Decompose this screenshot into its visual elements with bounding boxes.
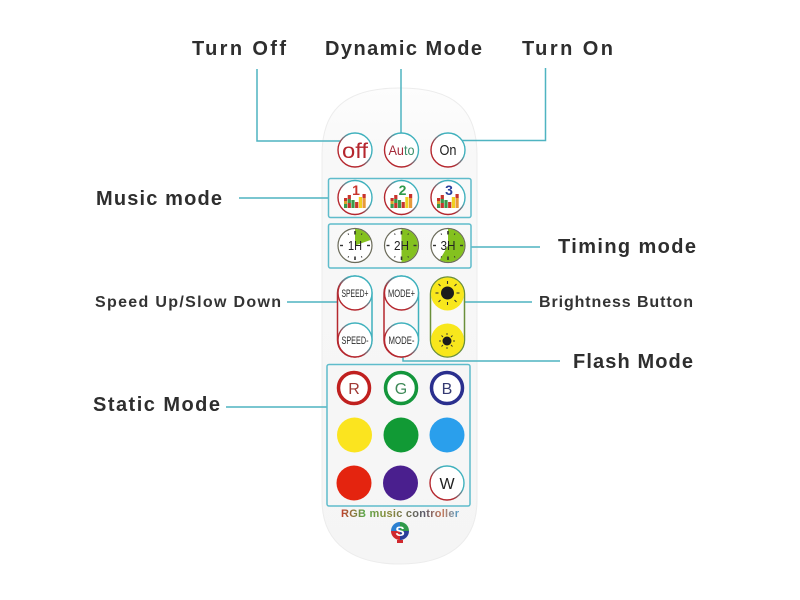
label: Speed Up/Slow Down: Speed Up/Slow Down: [95, 294, 281, 311]
label: Static Mode: Static Mode: [93, 394, 220, 416]
button: music 1: [338, 180, 372, 214]
button: light blue: [430, 418, 464, 452]
button: 2H: [384, 228, 418, 262]
button: G: [386, 372, 416, 404]
connector: Flash Mode: [403, 357, 560, 361]
button: 1H: 1H: [348, 238, 362, 253]
button: R: [338, 372, 370, 404]
button: B: B: [442, 381, 452, 398]
button: red: [336, 466, 372, 500]
button: Auto: Auto: [388, 142, 415, 158]
label: Turn Off: Turn Off: [192, 38, 286, 60]
connector: Music mode: [239, 197, 328, 199]
connector: Static Mode: [226, 406, 327, 408]
button: purple: [383, 466, 418, 500]
label: Dynamic Mode: Dynamic Mode: [325, 38, 482, 60]
button pair: mode: [384, 276, 418, 357]
button pair: speed: [338, 276, 372, 357]
connector: Turn On: [460, 68, 546, 140]
panel: timing mode buttons: [328, 224, 471, 268]
button: 3H: 3H: [440, 238, 456, 253]
label: Turn On: Turn On: [522, 38, 613, 60]
button: music 3: 3: [445, 182, 453, 198]
button: B: [432, 372, 462, 404]
button: off: [338, 133, 372, 167]
panel: static mode buttons: [327, 364, 470, 506]
button: R: R: [348, 381, 360, 398]
label: Music mode: Music mode: [96, 188, 222, 210]
button: MODE+: MODE+: [388, 288, 415, 300]
button: W: [430, 466, 464, 500]
button: music 2: 2: [399, 182, 407, 198]
connector: Brightness Button: [465, 301, 532, 303]
button: 2H: 2H: [394, 238, 409, 253]
button: green: [384, 418, 418, 452]
connector: Timing mode: [471, 246, 540, 248]
button: 3H: [431, 228, 465, 262]
icon: brand logo: S: [395, 523, 405, 539]
button: MODE-: MODE-: [388, 335, 415, 347]
remote body: [322, 88, 477, 564]
button: G: G: [395, 381, 407, 398]
button: music 3: [431, 180, 465, 214]
icon: bright sun: [431, 278, 464, 310]
button: 1H: [338, 228, 372, 262]
button: music 2: [384, 180, 418, 214]
label: Flash Mode: Flash Mode: [573, 351, 693, 373]
brand text: RGB music controller: [341, 508, 460, 520]
label: Brightness Button: Brightness Button: [539, 294, 693, 311]
button: music 1: 1: [352, 182, 360, 198]
button: SPEED+: SPEED+: [342, 288, 368, 300]
icon: dim sun: [431, 324, 464, 356]
label: Timing mode: Timing mode: [558, 236, 696, 258]
button: yellow: [337, 418, 372, 452]
icon: brand logo: [391, 522, 409, 543]
panel: music mode buttons: [328, 178, 471, 218]
connector: Speed Up/Slow Down: [287, 301, 337, 303]
button: W: W: [439, 476, 455, 493]
button: On: [431, 133, 465, 167]
button: On: On: [440, 142, 456, 159]
button: off: off: [342, 140, 368, 163]
button pair: brightness: [430, 277, 464, 357]
connector: Turn Off: [257, 69, 340, 141]
button: Auto: [384, 133, 418, 167]
button: SPEED-: SPEED-: [342, 335, 369, 347]
connector: Dynamic Mode: [400, 69, 402, 134]
